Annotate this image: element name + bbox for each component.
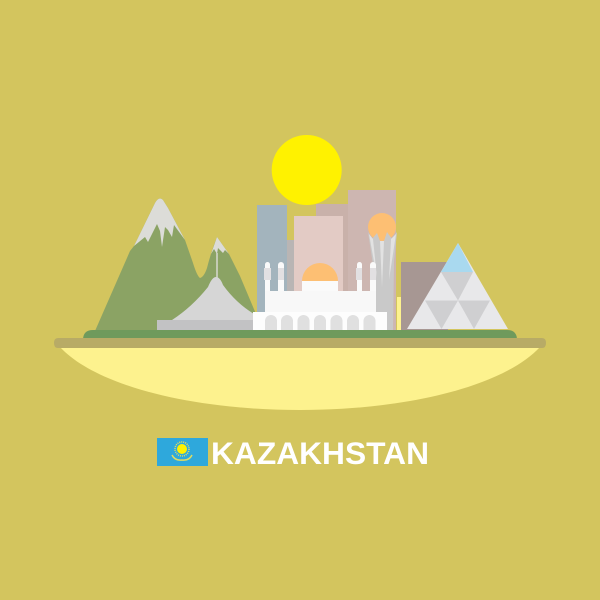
grass strip: [83, 330, 517, 340]
building: yellow strip: [397, 297, 401, 330]
ground band: [54, 338, 546, 348]
building: blue tower: [257, 205, 287, 331]
sun: [272, 135, 342, 205]
tent building: Khan Shatyr: [157, 253, 254, 331]
flag of Kazakhstan: [157, 438, 208, 466]
building: mauve tower: [348, 190, 396, 330]
building: back tan tower: [316, 204, 349, 304]
title: KAZAKHSTAN: [211, 435, 429, 471]
building: pink tower: [294, 216, 343, 306]
mountains: [95, 199, 256, 331]
floating island base: [60, 347, 540, 410]
Bayterek tower: [368, 213, 397, 331]
building: grey back block: [287, 240, 295, 330]
mosque: [253, 262, 387, 331]
building: brown block: [401, 262, 448, 330]
pyramid: [407, 243, 508, 329]
